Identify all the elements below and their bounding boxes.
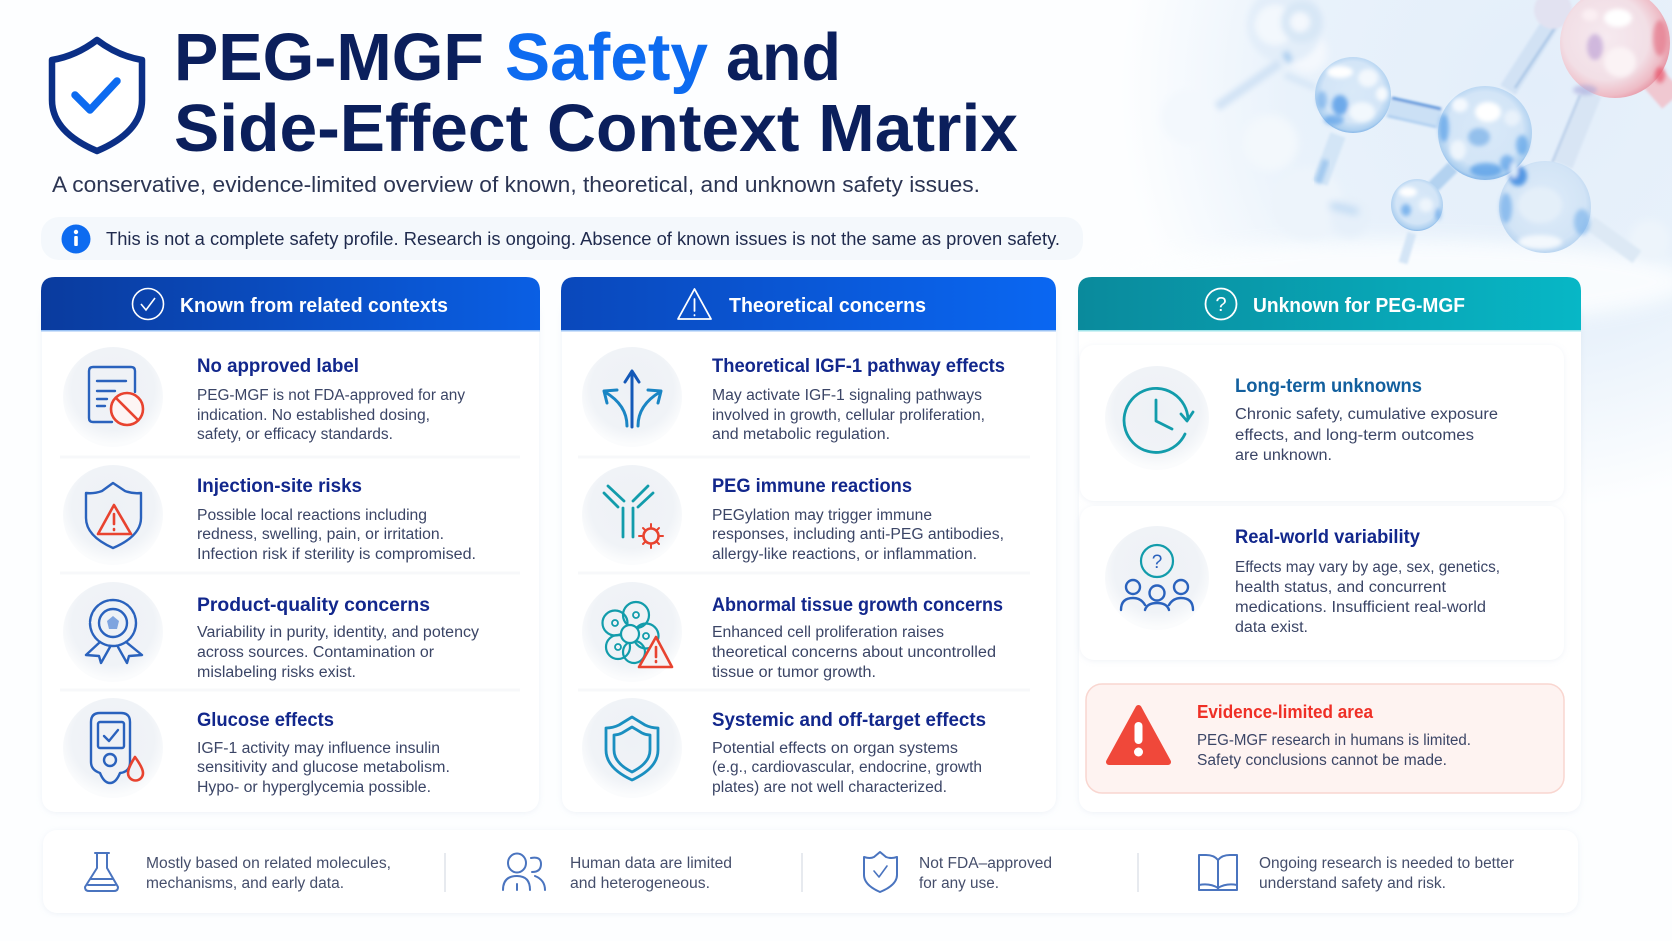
footer summary bar	[43, 830, 1578, 913]
icon: document with prohibition	[89, 367, 143, 425]
item: IGF-1 pathway effects: May activate IGF-1 signaling pathways	[712, 387, 982, 404]
item: injection-site risks: Injection-site risks	[197, 476, 362, 497]
item: abnormal tissue growth: Abnormal tissue growth concerns	[712, 595, 1003, 616]
header: theoretical	[561, 277, 1056, 332]
disclaimer text: This is not a complete safety profile. Research is ongoing. Absence of known issues is not the same as proven safety.	[106, 229, 1060, 249]
header: theoretical: Theoretical concerns	[729, 295, 926, 317]
item: abnormal tissue growth: theoretical concerns about uncontrolled	[712, 644, 996, 661]
item: no approved label: PEG-MGF is not FDA-approved for any	[197, 387, 465, 404]
item: PEG immune reactions: responses, including anti-PEG antibodies,	[712, 526, 1004, 543]
item: no approved label: safety, or efficacy standards.	[197, 426, 393, 443]
panel: known from related contexts	[41, 277, 540, 812]
card: real-world variability: Effects may vary by age, sex, genetics,	[1235, 559, 1500, 576]
footer item: related molecules: Mostly based on related molecules,	[146, 855, 391, 872]
item: glucose effects: Glucose effects	[197, 710, 334, 731]
subtitle: A conservative, evidence-limited overview of known, theoretical, and unknown safety issues.	[52, 172, 980, 197]
title: and	[726, 20, 841, 95]
item: no approved label: indication. No established dosing,	[197, 407, 430, 424]
callout: evidence-limited area: Safety conclusions cannot be made.	[1197, 752, 1447, 769]
item: systemic and off-target: Potential effects on organ systems	[712, 740, 958, 757]
panel: theoretical concerns	[561, 277, 1056, 812]
sphere: pink	[1560, 0, 1670, 98]
item: injection-site risks: redness, swelling, pain, or irritation.	[197, 526, 444, 543]
card: real-world variability: health status, and concurrent	[1235, 579, 1447, 596]
icon: two people	[503, 854, 545, 890]
sphere: small	[1391, 179, 1443, 231]
callout: evidence-limited area	[1086, 684, 1564, 793]
item: IGF-1 pathway effects	[582, 347, 1005, 447]
icon: question circle: ?	[1215, 294, 1227, 316]
item: systemic and off-target: (e.g., cardiovascular, endocrine, growth	[712, 759, 982, 776]
icon: cells with warning	[602, 602, 672, 667]
item: abnormal tissue growth: Enhanced cell proliferation raises	[712, 624, 944, 641]
icon: people with question	[1121, 545, 1193, 610]
item: systemic and off-target: plates) are not well characterized.	[712, 779, 947, 796]
footer item: ongoing research: Ongoing research is needed to better	[1259, 855, 1514, 872]
item: PEG immune reactions: allergy-like reactions, or inflammation.	[712, 546, 977, 563]
item: injection-site risks: Possible local reactions including	[197, 507, 427, 524]
info disclaimer bar	[41, 217, 1083, 260]
item: IGF-1 pathway effects: involved in growth, cellular proliferation,	[712, 407, 985, 424]
icon: info	[62, 224, 90, 254]
icon: clock	[1124, 388, 1193, 452]
shield logo icon	[52, 40, 142, 151]
card: real-world variability: Real-world variability	[1235, 527, 1420, 548]
icon: flask	[85, 853, 118, 891]
item: abnormal tissue growth	[582, 582, 1003, 682]
panel: unknown for PEG-MGF	[1078, 277, 1581, 812]
card: real-world variability: medications. Insufficient real-world	[1235, 599, 1486, 616]
footer item: ongoing research	[1199, 855, 1514, 892]
icon: open book	[1199, 855, 1237, 890]
header: known: Known from related contexts	[180, 295, 448, 317]
title: PEG-MGF	[174, 20, 484, 95]
callout: evidence-limited area: PEG-MGF research in humans is limited.	[1197, 732, 1471, 749]
card: long-term unknowns: are unknown.	[1235, 447, 1332, 464]
sphere: left	[1315, 57, 1391, 133]
footer item: not FDA approved	[864, 852, 1052, 892]
icon: question circle	[1206, 288, 1236, 320]
glass rods	[1388, 0, 1672, 263]
item: product-quality concerns: Product-quality concerns	[197, 595, 430, 616]
sphere: centre	[1438, 86, 1532, 180]
footer item: not FDA approved: for any use.	[919, 875, 999, 892]
faint background molecule	[1161, 0, 1670, 260]
footer item: human data: and heterogeneous.	[570, 875, 710, 892]
title	[174, 20, 1018, 166]
item: product-quality concerns: across sources. Contamination or	[197, 644, 434, 661]
molecule illustration	[1161, 0, 1672, 263]
card: long-term unknowns: effects, and long-term outcomes	[1235, 427, 1474, 444]
item: glucose effects: sensitivity and glucose metabolism.	[197, 759, 450, 776]
footer item: related molecules: mechanisms, and early data.	[146, 875, 344, 892]
item: glucose effects: IGF-1 activity may influence insulin	[197, 740, 440, 757]
icon: red warning triangle	[1109, 708, 1168, 762]
icon: people with question: ?	[1152, 552, 1162, 573]
item: abnormal tissue growth: tissue or tumor growth.	[712, 664, 876, 681]
card: real-world variability: data exist.	[1235, 619, 1308, 636]
footer item: related molecules	[85, 853, 391, 892]
item: PEG immune reactions: PEGylation may trigger immune	[712, 507, 932, 524]
icon: glucose meter	[91, 713, 143, 783]
item: no approved label	[63, 347, 465, 447]
item: glucose effects	[63, 698, 450, 798]
item: IGF-1 pathway effects: Theoretical IGF-1 pathway effects	[712, 356, 1005, 377]
title: Safety	[505, 20, 708, 95]
footer item: human data: Human data are limited	[570, 855, 732, 872]
icon: branching arrows	[604, 371, 661, 427]
item: glucose effects: Hypo- or hyperglycemia possible.	[197, 779, 431, 796]
icon: shield check	[864, 852, 897, 892]
icon: check circle	[132, 288, 164, 320]
header: unknown	[1078, 277, 1581, 332]
icon: warning triangle	[678, 289, 711, 319]
item: systemic and off-target: Systemic and off-target effects	[712, 710, 986, 731]
card: long-term unknowns: Long-term unknowns	[1235, 376, 1422, 397]
icon: shield with warning	[86, 483, 141, 548]
sphere: lower right	[1499, 155, 1591, 253]
footer item: human data	[503, 854, 732, 892]
item: product-quality concerns	[63, 582, 479, 682]
icon: rosette	[86, 600, 142, 663]
header: known	[41, 277, 540, 332]
footer item: not FDA approved: Not FDA–approved	[919, 855, 1052, 872]
icon: shield	[606, 717, 658, 780]
card: long-term unknowns: Chronic safety, cumulative exposure	[1235, 406, 1498, 423]
card: real-world variability	[1080, 506, 1564, 660]
item: systemic and off-target	[582, 698, 986, 798]
card: long-term unknowns	[1080, 345, 1564, 501]
item: IGF-1 pathway effects: and metabolic regulation.	[712, 426, 890, 443]
header: unknown: Unknown for PEG-MGF	[1253, 295, 1465, 317]
item: injection-site risks: Infection risk if sterility is compromised.	[197, 546, 476, 563]
title: Side-Effect Context Matrix	[174, 91, 1018, 166]
item: PEG immune reactions	[582, 465, 1004, 565]
item: PEG immune reactions: PEG immune reactions	[712, 476, 912, 497]
footer item: ongoing research: understand safety and risk.	[1259, 875, 1446, 892]
item: injection-site risks	[63, 465, 476, 565]
item: product-quality concerns: mislabeling risks exist.	[197, 664, 356, 681]
item: no approved label: No approved label	[197, 356, 359, 377]
item: product-quality concerns: Variability in purity, identity, and potency	[197, 624, 479, 641]
icon: antibody	[604, 486, 663, 548]
callout: evidence-limited area: Evidence-limited area	[1197, 701, 1374, 722]
